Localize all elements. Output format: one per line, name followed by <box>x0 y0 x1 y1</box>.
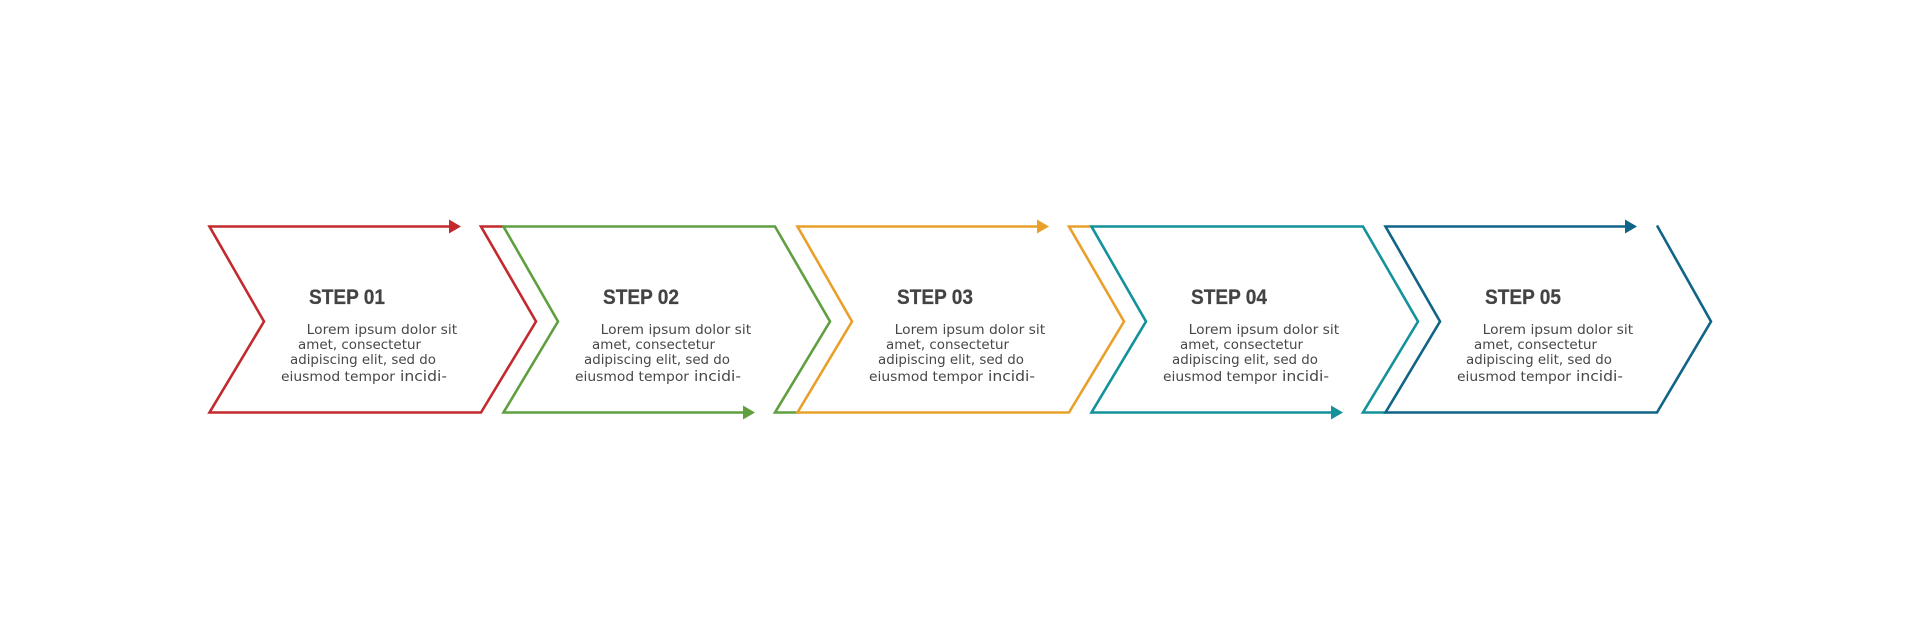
text block: step 01: Lorem ipsum dolor sit <box>307 323 457 338</box>
arrow: orange top <box>1037 220 1049 234</box>
text block: step 02 <box>575 323 751 385</box>
arrow: green bottom <box>743 406 755 420</box>
text block: step 01: incidi- <box>400 369 447 385</box>
text block: step 02: amet, consectetur <box>592 338 716 353</box>
text block: step 05: Lorem ipsum dolor sit <box>1483 323 1633 338</box>
text block: step 02: Lorem ipsum dolor sit <box>601 323 751 338</box>
heading: step 01: STEP 01 <box>309 285 385 309</box>
panel: step 05 <box>1386 220 1711 412</box>
text block: step 03: eiusmod tempor <box>869 370 984 385</box>
text block: step 05 <box>1457 323 1633 385</box>
text block: step 03: amet, consectetur <box>886 338 1010 353</box>
text block: step 05: incidi- <box>1576 369 1623 385</box>
text block: step 05: adipiscing elit, sed do <box>1466 353 1612 368</box>
text block: step 03 <box>869 323 1045 385</box>
text block: step 03: Lorem ipsum dolor sit <box>895 323 1045 338</box>
teal chevron outline <box>1092 226 1418 412</box>
arrow: red top <box>449 220 461 234</box>
text block: step 04: amet, consectetur <box>1180 338 1304 353</box>
text block: step 05: amet, consectetur <box>1474 338 1598 353</box>
text block: step 04: Lorem ipsum dolor sit <box>1189 323 1339 338</box>
panel: step 04 <box>1092 226 1418 420</box>
panel: step 03 <box>798 220 1124 412</box>
panel: step 02 <box>504 226 830 420</box>
text block: step 04 <box>1163 323 1339 385</box>
red chevron outline <box>210 226 536 412</box>
arrow: blue top <box>1625 220 1637 234</box>
text block: step 01: adipiscing elit, sed do <box>290 353 436 368</box>
blue chevron outline <box>1386 226 1711 412</box>
text block: step 03: incidi- <box>988 369 1035 385</box>
green chevron outline <box>504 226 830 412</box>
orange chevron outline <box>798 226 1124 412</box>
text block: step 01 <box>281 323 457 385</box>
arrow: teal bottom <box>1331 406 1343 420</box>
text block: step 01: amet, consectetur <box>298 338 422 353</box>
text block: step 02: adipiscing elit, sed do <box>584 353 730 368</box>
text block: step 02: incidi- <box>694 369 741 385</box>
text block: step 04: eiusmod tempor <box>1163 370 1278 385</box>
heading: step 02: STEP 02 <box>603 285 679 309</box>
heading: step 03: STEP 03 <box>897 285 973 309</box>
heading: step 05: STEP 05 <box>1485 285 1561 309</box>
panel: step 01 <box>210 220 536 412</box>
text block: step 04: incidi- <box>1282 369 1329 385</box>
text block: step 03: adipiscing elit, sed do <box>878 353 1024 368</box>
text block: step 02: eiusmod tempor <box>575 370 690 385</box>
text block: step 04: adipiscing elit, sed do <box>1172 353 1318 368</box>
text block: step 05: eiusmod tempor <box>1457 370 1572 385</box>
text block: step 01: eiusmod tempor <box>281 370 396 385</box>
heading: step 04: STEP 04 <box>1191 285 1267 309</box>
